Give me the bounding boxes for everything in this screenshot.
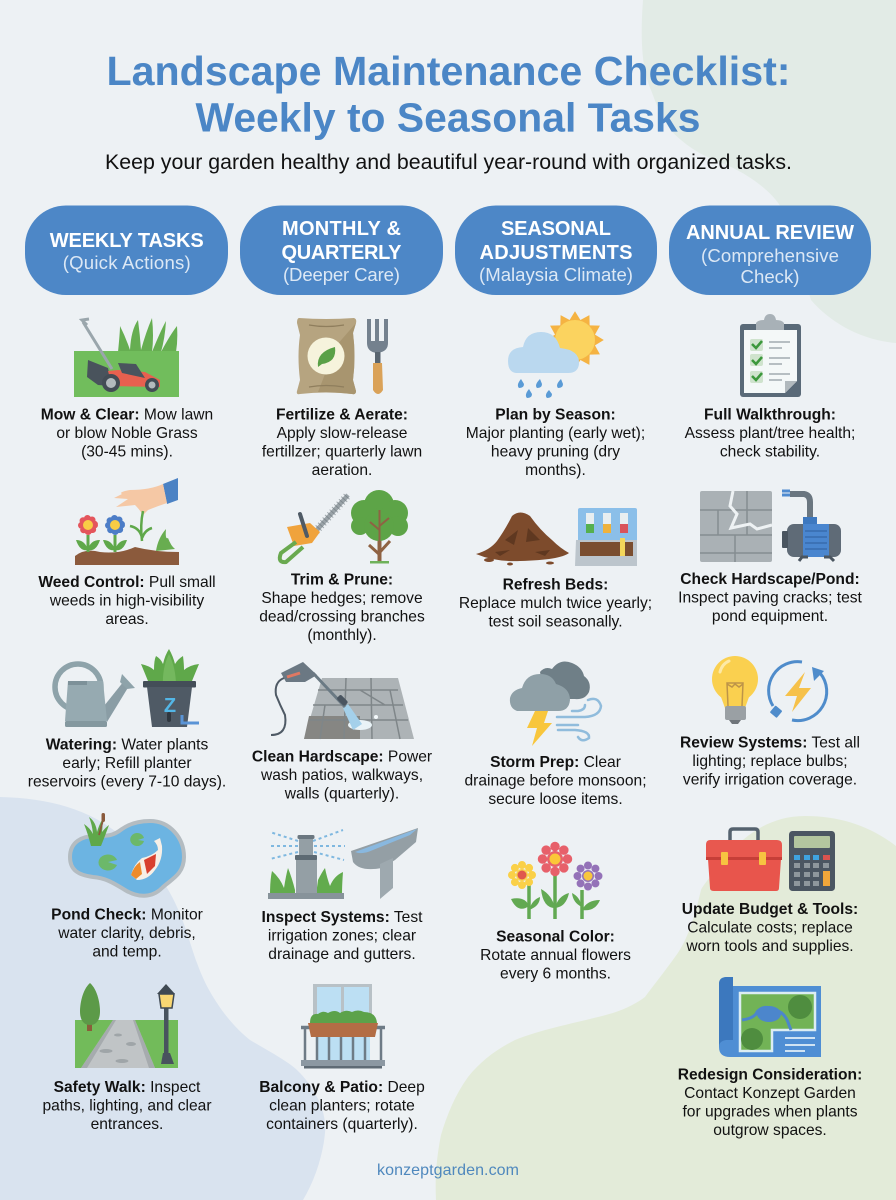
text: balcony and patio: clean planters; rotate <box>269 1098 415 1114</box>
text: watering: Water plants <box>117 736 209 754</box>
icon: cracked paving and pump <box>700 491 841 562</box>
header: seasonal adjustments: SEASONAL <box>501 218 611 240</box>
text: pond check: Monitor <box>146 906 203 924</box>
text: check hardscape and pond: Inspect paving cracks; test <box>678 590 863 606</box>
icon: light bulb and energy cycle <box>712 656 827 724</box>
icon: balcony planter <box>301 984 385 1068</box>
text: weed control: weeds in high-visibility <box>49 592 204 610</box>
text: watering: Watering: <box>46 736 117 754</box>
icon: red toolbox and calculator <box>706 829 835 891</box>
text: trim and prune: dead/crossing branches <box>259 608 425 626</box>
icon: storm cloud, lightning and wind <box>510 661 601 746</box>
text: safety walk: paths, lighting, and clear <box>42 1098 212 1114</box>
text: mow and clear: (30-45 mins). <box>81 444 173 460</box>
text: clean hardscape: walls (quarterly). <box>284 786 399 802</box>
text: fertilize and aerate: Fertilize & Aerate: <box>276 406 408 424</box>
text: mow and clear: Mow & Clear: <box>41 406 140 424</box>
header: monthly and quarterly: QUARTERLY <box>282 242 402 264</box>
text: review systems: Test all <box>807 734 860 752</box>
subtitle: Keep your garden healthy and beautiful year-round with organized tasks. <box>105 149 792 174</box>
task: check hardscape and pond <box>678 491 863 625</box>
text: pond check: water clarity, debris, <box>57 925 196 942</box>
task: full walkthrough <box>685 314 855 460</box>
header: weekly tasks: WEEKLY TASKS <box>50 230 204 252</box>
text: inspect systems: drainage and gutters. <box>268 946 416 963</box>
header: seasonal adjustments <box>455 206 657 295</box>
footer link: konzeptgarden.com <box>377 1162 519 1179</box>
header: annual review: (Comprehensive <box>701 245 839 266</box>
text: balcony and patio: Balcony & Patio: <box>259 1079 383 1096</box>
header: seasonal adjustments: ADJUSTMENTS <box>480 242 632 264</box>
text: seasonal color: every 6 months. <box>500 966 611 982</box>
task: balcony and patio <box>259 984 425 1133</box>
text: refresh beds: Refresh Beds: <box>503 576 608 594</box>
header: annual review: Check) <box>740 266 800 287</box>
icon: hand pulling weeds <box>75 478 179 565</box>
task: inspect systems <box>262 828 423 963</box>
icon: mulch pile and soil test kit <box>476 508 637 566</box>
text: inspect systems: Test <box>390 909 423 926</box>
text: redesign consideration: outgrow spaces. <box>713 1122 827 1139</box>
title <box>106 48 790 140</box>
icon: landscape blueprint <box>719 977 821 1057</box>
text: safety walk: Inspect <box>146 1079 201 1096</box>
text: weed control: areas. <box>105 611 149 628</box>
title: Weekly to Seasonal Tasks <box>196 94 700 140</box>
text: plan by season: Major planting (early wet); <box>466 425 645 442</box>
task: seasonal color <box>480 846 631 982</box>
text: trim and prune: Trim & Prune: <box>291 572 393 588</box>
text: plan by season: heavy pruning (dry <box>491 444 620 460</box>
icon: watering can and planter: Z <box>164 695 176 717</box>
text: trim and prune: (monthly). <box>307 627 377 644</box>
text: update budget and tools: Update Budget & Tools: <box>682 901 858 918</box>
text: storm prep: drainage before monsoon; <box>464 772 647 790</box>
text: redesign consideration: Contact Konzept Garden <box>684 1085 856 1102</box>
text: review systems: lighting; replace bulbs; <box>692 753 848 770</box>
header: monthly and quarterly: (Deeper Care) <box>283 264 400 285</box>
text: safety walk: Safety Walk: <box>54 1079 146 1096</box>
header: seasonal adjustments: (Malaysia Climate) <box>479 264 633 285</box>
text: storm prep: secure loose items. <box>488 791 623 808</box>
task: review systems <box>680 656 860 788</box>
text: seasonal color: Seasonal Color: <box>496 928 615 946</box>
text: weed control: Weed Control: <box>38 574 145 591</box>
task: fertilize and aerate <box>262 318 422 479</box>
icon: clipboard checklist <box>740 314 801 397</box>
text: watering: early; Refill planter <box>62 755 192 772</box>
text: review systems: verify irrigation coverage. <box>683 772 857 788</box>
header: monthly and quarterly: MONTHLY & <box>282 218 401 240</box>
task: plan by season <box>466 311 645 479</box>
title: Landscape Maintenance Checklist: <box>106 48 790 94</box>
text: clean hardscape: wash patios, walkways, <box>260 767 423 784</box>
text: watering: reservoirs (every 7-10 days). <box>28 774 226 790</box>
text: plan by season: Plan by Season: <box>495 406 616 424</box>
task: pond check <box>51 813 203 960</box>
icon: watering can and planter <box>55 649 199 727</box>
text: check hardscape and pond: pond equipment. <box>712 608 828 625</box>
task: clean hardscape <box>252 662 432 802</box>
icon: sprinkler and gutter <box>268 828 418 899</box>
icon: hedge trimmer and tree <box>280 490 408 564</box>
icon: lawn mower <box>74 318 179 397</box>
text: update budget and tools: Calculate costs; replace <box>687 920 853 936</box>
task: weed control <box>38 478 216 628</box>
text: refresh beds: Replace mulch twice yearly; <box>459 595 652 612</box>
text: full walkthrough: Full Walkthrough: <box>704 406 836 424</box>
text: mow and clear: Mow lawn <box>140 406 213 424</box>
text: full walkthrough: Assess plant/tree health; <box>685 425 855 442</box>
text: storm prep: Clear <box>579 754 621 771</box>
text: update budget and tools: worn tools and supplies. <box>685 938 854 955</box>
task: storm prep <box>464 661 647 808</box>
header: monthly and quarterly <box>240 206 443 295</box>
task: refresh beds <box>459 508 652 630</box>
text: fertilize and aerate: aeration. <box>312 462 372 479</box>
task: trim and prune <box>259 490 425 644</box>
text: clean hardscape: Clean Hardscape: <box>252 748 384 766</box>
text: balcony and patio: containers (quarterly). <box>266 1116 418 1133</box>
text: inspect systems: Inspect Systems: <box>262 909 390 926</box>
text: balcony and patio: Deep <box>383 1079 425 1096</box>
text: clean hardscape: Power <box>384 748 432 766</box>
text: weed control: Pull small <box>145 574 216 591</box>
header: annual review: ANNUAL REVIEW <box>686 222 854 244</box>
text: fertilize and aerate: Apply slow-release <box>277 425 407 442</box>
header: weekly tasks: (Quick Actions) <box>63 252 191 273</box>
text: pond check: and temp. <box>92 944 162 960</box>
task: mow and clear <box>41 318 213 460</box>
text: review systems: Review Systems: <box>680 734 807 752</box>
text: fertilize and aerate: fertillzer; quarterly lawn <box>262 444 422 460</box>
icon: garden path with lamp <box>75 983 178 1068</box>
task: safety walk <box>42 983 212 1133</box>
text: full walkthrough: check stability. <box>720 444 820 460</box>
text: redesign consideration: Redesign Consideration: <box>678 1066 862 1084</box>
text: plan by season: months). <box>525 462 586 479</box>
text: pond check: Pond Check: <box>51 906 146 924</box>
task: watering <box>28 649 226 790</box>
text: redesign consideration: for upgrades when plants <box>682 1104 858 1120</box>
text: mow and clear: or blow Noble Grass <box>56 425 198 442</box>
text: storm prep: Storm Prep: <box>490 754 579 771</box>
icon: three flowers <box>511 846 600 919</box>
icon: fertilizer bag and fork <box>297 318 388 394</box>
header: annual review <box>669 206 871 295</box>
task: redesign consideration <box>678 977 862 1139</box>
text: safety walk: entrances. <box>91 1116 163 1133</box>
text: seasonal color: Rotate annual flowers <box>480 947 631 964</box>
icon: pressure washer on paving <box>271 662 414 739</box>
icon: sun behind rain cloud <box>508 311 604 398</box>
text: trim and prune: Shape hedges; remove <box>261 590 423 607</box>
icon: koi pond <box>70 813 184 896</box>
text: check hardscape and pond: Check Hardscape/Pond: <box>680 571 860 588</box>
text: refresh beds: test soil seasonally. <box>488 614 623 630</box>
header: weekly tasks <box>25 206 228 295</box>
text: inspect systems: irrigation zones; clear <box>268 928 416 944</box>
task: update budget and tools <box>682 829 858 955</box>
